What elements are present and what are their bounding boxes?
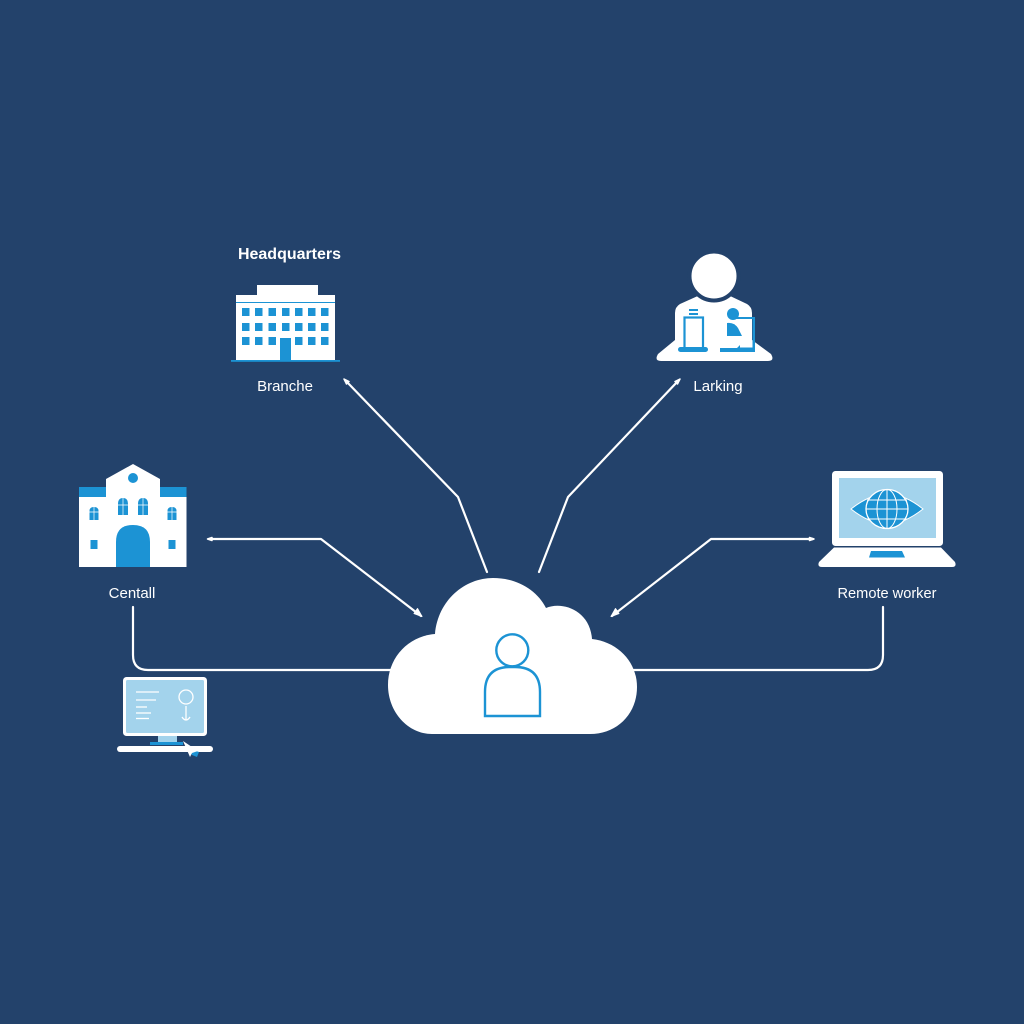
icon: user outline bbox=[485, 634, 540, 716]
icon: headquarters building bbox=[231, 285, 340, 362]
line: remote worker to cloud bbox=[632, 607, 883, 670]
heading: Headquarters: Headquarters bbox=[238, 246, 341, 263]
arrow: cloud to headquarters bbox=[344, 379, 487, 572]
icon: central cloud with user bbox=[388, 578, 637, 734]
arrow: remote worker to cloud bbox=[611, 538, 814, 616]
label: Larking: Larking bbox=[693, 378, 743, 395]
line: central to cloud bbox=[133, 607, 392, 670]
arrow: central to cloud bbox=[208, 538, 422, 616]
icon: desktop monitor bbox=[117, 677, 213, 757]
label: Remote worker: Remote worker bbox=[838, 586, 937, 602]
label: Branche: Branche bbox=[257, 378, 313, 395]
icon: person at desk bbox=[657, 252, 772, 361]
connector lines bbox=[133, 379, 883, 670]
icon: laptop with globe bbox=[818, 471, 956, 567]
icon: central building bbox=[79, 464, 186, 567]
arrow: cloud to laborer bbox=[539, 379, 680, 572]
label: Centall: Centall bbox=[109, 585, 155, 602]
